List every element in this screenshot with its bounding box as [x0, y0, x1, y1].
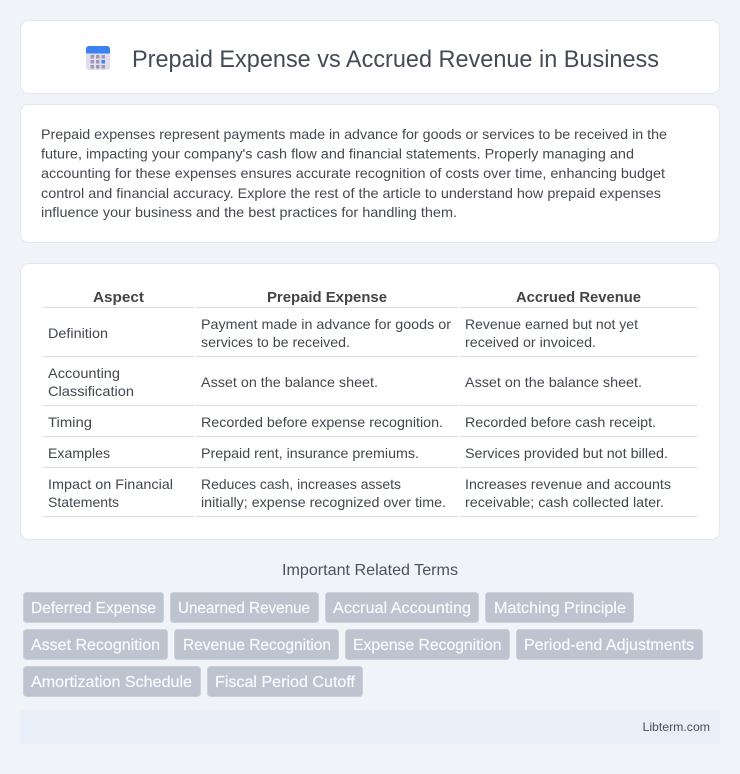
tag: accrual accounting: Accrual Accounting	[333, 600, 471, 617]
tag: expense recognition	[346, 630, 510, 660]
row: examples: Prepaid rent, insurance premiums.	[201, 445, 419, 461]
row: accounting classification	[48, 365, 642, 399]
tag: unearned revenue: Unearned Revenue	[178, 600, 310, 617]
text block: introduction: accounting for these expenses ensures accurate recognition of costs over time, enhancing budget	[41, 165, 665, 181]
footer credit: Libterm.com	[642, 720, 710, 734]
panel: header	[20, 20, 720, 94]
tag: matching principle	[486, 592, 634, 622]
tag: amortization schedule	[24, 666, 200, 696]
text block: introduction: Prepaid expenses represent payments made in advance for goods or services to be received in the	[41, 126, 667, 142]
tag: period-end adjustments: Period-end Adjustments	[524, 637, 694, 654]
row: examples	[48, 445, 668, 461]
row: definition: Definition	[48, 325, 108, 341]
row: impact on financial statements: initially; expense recognized over time.	[201, 494, 446, 510]
row: impact on financial statements: Impact on Financial	[48, 476, 173, 492]
tag: period-end adjustments	[516, 630, 702, 660]
row: examples: Examples	[48, 445, 110, 461]
tag: asset recognition	[24, 630, 168, 660]
table header	[93, 289, 641, 306]
tag: expense recognition: Expense Recognition	[353, 637, 502, 654]
text block: introduction: influence your business and the best practices for handling them.	[41, 204, 457, 220]
tag: revenue recognition: Revenue Recognition	[183, 637, 331, 654]
panel: introduction	[20, 104, 720, 242]
table header: Prepaid Expense	[267, 289, 387, 306]
row: definition: Payment made in advance for goods or	[201, 316, 451, 332]
table header: Aspect	[93, 289, 144, 306]
tag: asset recognition: Asset Recognition	[31, 637, 160, 654]
text block: introduction: future, impacting your company's cash flow and financial statements. Properly managing and	[41, 146, 634, 162]
row: timing: Recorded before cash receipt.	[465, 414, 656, 430]
row: impact on financial statements: Increases revenue and accounts	[465, 476, 671, 492]
tag: fiscal period cutoff: Fiscal Period Cutoff	[215, 674, 356, 691]
row: accounting classification: Asset on the balance sheet.	[465, 374, 642, 390]
footer	[20, 710, 720, 744]
row: accounting classification: Asset on the balance sheet.	[201, 374, 378, 390]
icon: calendar	[86, 46, 110, 70]
title: Prepaid Expense vs Accrued Revenue in Business	[132, 46, 659, 73]
row: definition: services to be received.	[201, 334, 350, 350]
table header: Accrued Revenue	[516, 289, 641, 306]
row: timing	[48, 414, 656, 430]
tag: unearned revenue	[170, 592, 318, 622]
row: timing: Timing	[48, 414, 92, 430]
row: impact on financial statements	[48, 476, 671, 510]
row: examples: Services provided but not billed.	[465, 445, 668, 461]
tag: revenue recognition	[174, 630, 338, 660]
row: impact on financial statements: Statements	[48, 494, 119, 510]
tag: deferred expense	[24, 592, 164, 622]
row: impact on financial statements: Reduces cash, increases assets	[201, 476, 401, 492]
row: definition: Revenue earned but not yet	[465, 316, 638, 332]
row: definition: received or invoiced.	[465, 334, 596, 350]
related term tags	[24, 592, 702, 696]
tag: accrual accounting	[326, 592, 478, 622]
tag: amortization schedule: Amortization Schedule	[31, 674, 192, 691]
panel: comparison table	[20, 264, 720, 540]
row: accounting classification: Accounting	[48, 365, 120, 381]
tag: deferred expense: Deferred Expense	[31, 600, 156, 617]
heading: important related terms: Important Related Terms	[282, 562, 458, 579]
tag: matching principle: Matching Principle	[494, 600, 626, 617]
row: accounting classification: Classification	[48, 383, 134, 399]
tag: fiscal period cutoff	[208, 666, 362, 696]
row: impact on financial statements: receivable; cash collected later.	[465, 494, 664, 510]
text block: introduction	[41, 126, 667, 220]
row: definition	[48, 316, 638, 350]
text block: introduction: control and financial accuracy. Explore the rest of the article to understand how prepaid expenses	[41, 185, 661, 201]
row: timing: Recorded before expense recognition.	[201, 414, 443, 430]
